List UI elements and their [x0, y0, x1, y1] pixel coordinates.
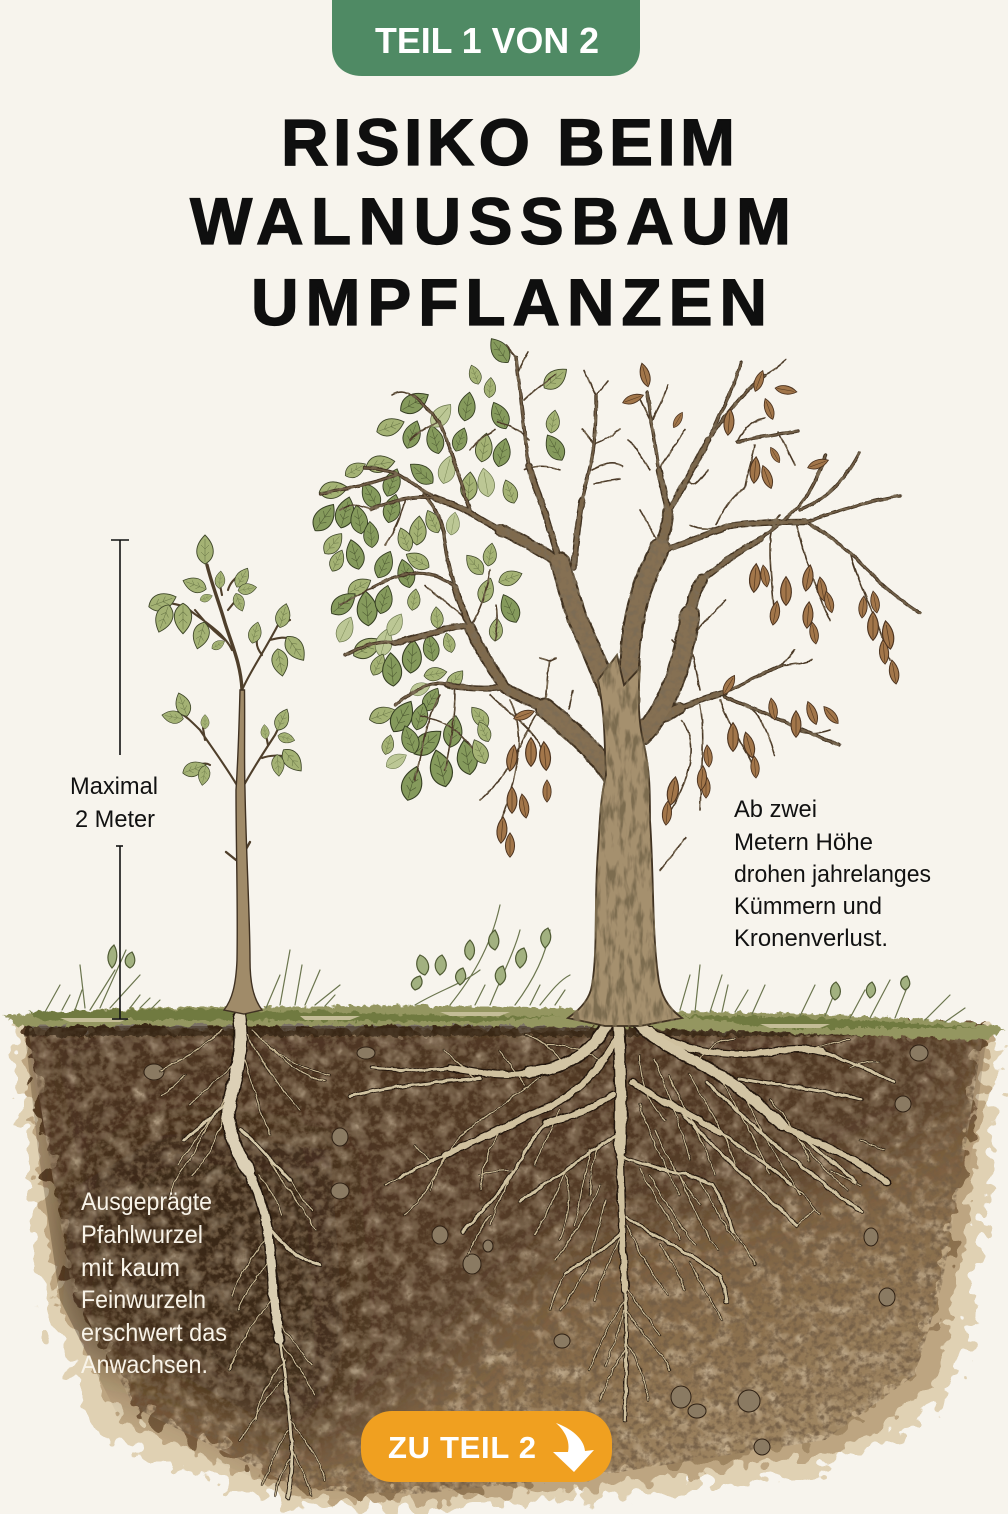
- sapling: [146, 535, 310, 1014]
- text: mature tree note: Kronenverlust.: [734, 925, 888, 952]
- grass tufts and weeds: [45, 905, 965, 1022]
- button: to part 2: ZU TEIL 2: [388, 1430, 536, 1465]
- text: mature tree note: [734, 796, 931, 952]
- title: [190, 105, 791, 339]
- green crown leaves: [308, 334, 572, 803]
- mature tree: [308, 334, 920, 1026]
- tag: part 1 of 2: TEIL 1 VON 2: [375, 20, 599, 61]
- sapling leaves: [146, 535, 310, 786]
- soil cross-section: [14, 1010, 998, 1512]
- dried brown leaves: [496, 362, 901, 857]
- tag: part 1 of 2: [332, 0, 640, 76]
- text: taproot note: Ausgeprägte: [81, 1188, 212, 1216]
- text: taproot note: Anwachsen.: [81, 1351, 208, 1379]
- text: mature tree note: Metern Höhe: [734, 829, 873, 856]
- title: WALNUSSBAUM: [190, 184, 791, 258]
- label: height: [70, 773, 158, 833]
- label: height: Maximal: [70, 773, 158, 800]
- text: taproot note: mit kaum: [81, 1254, 180, 1282]
- title: RISIKO BEIM: [281, 105, 735, 179]
- button: to part 2: [361, 1411, 612, 1482]
- text: taproot note: erschwert das: [81, 1319, 227, 1347]
- ground grass strip: [2, 1006, 1004, 1040]
- sapling branches: [165, 565, 292, 860]
- height bracket: maximal 2 meter: [111, 540, 129, 1019]
- text: mature tree note: Kümmern und: [734, 893, 882, 920]
- title: UMPFLANZEN: [251, 265, 767, 339]
- text: taproot note: [81, 1188, 227, 1379]
- text: mature tree note: drohen jahrelanges: [734, 861, 931, 888]
- text: mature tree note: Ab zwei: [734, 796, 817, 823]
- text: taproot note: Pfahlwurzel: [81, 1221, 203, 1249]
- mature tree roots: [350, 1015, 893, 1420]
- text: taproot note: Feinwurzeln: [81, 1286, 206, 1314]
- stones in soil: [144, 1045, 928, 1455]
- label: height: 2 Meter: [75, 806, 155, 833]
- tree branches: [320, 345, 920, 870]
- sapling trunk: [224, 690, 262, 1014]
- tree trunk: [568, 655, 682, 1026]
- sapling roots: [160, 1018, 330, 1498]
- icon: curved arrow: [553, 1423, 594, 1472]
